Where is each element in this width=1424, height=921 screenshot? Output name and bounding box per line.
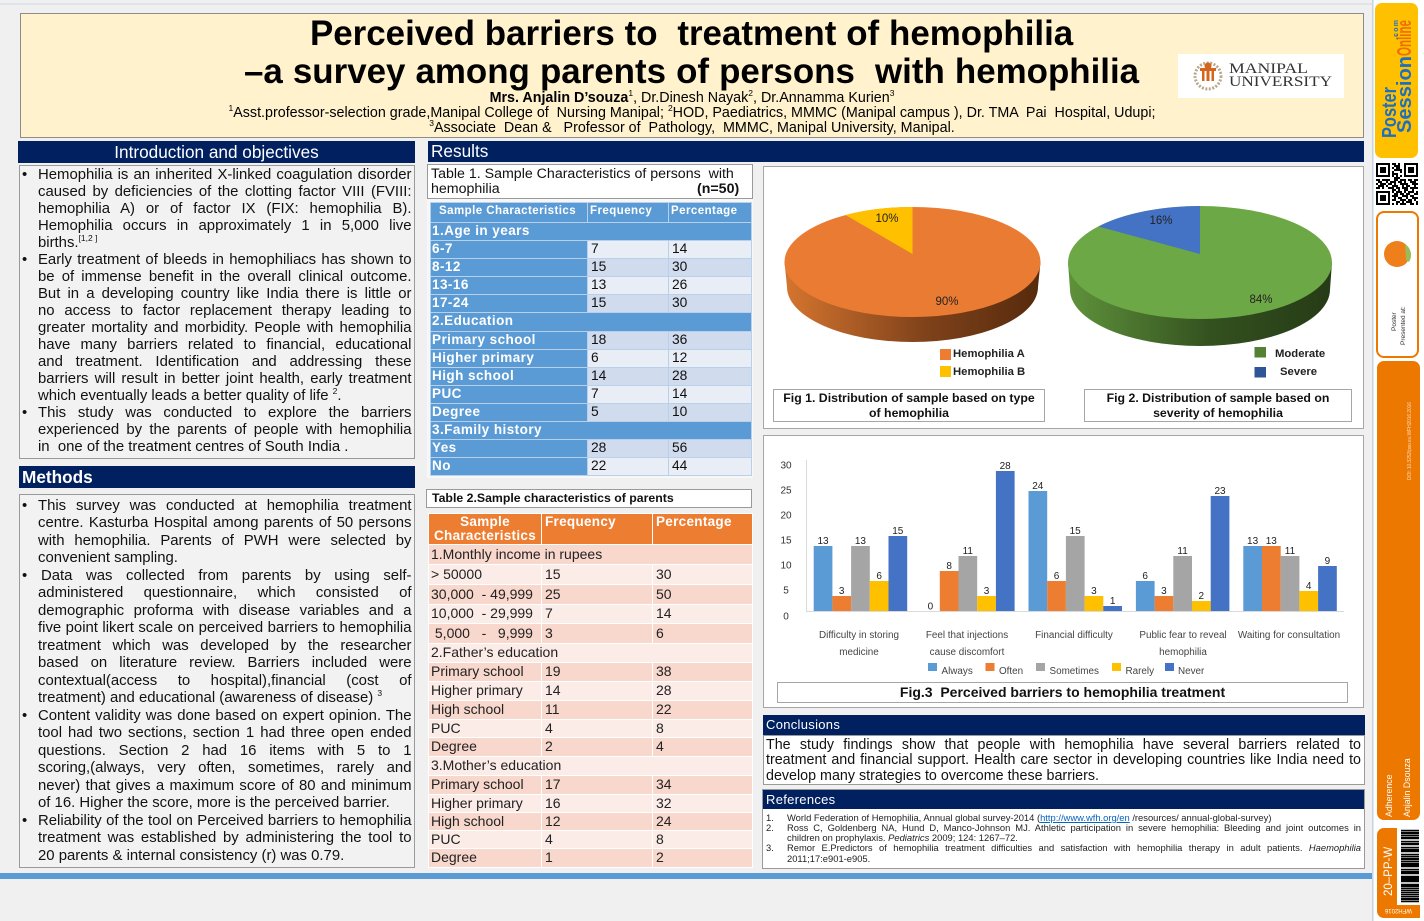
orange info strip: DOI: 10.3252/pso.eu.WFH2016.2016 [1407,402,1413,480]
panel: methods text: never) that gives a maximum score of 80 and minimum [38,778,412,794]
bars: often [832,546,1281,611]
orange info strip [1377,361,1420,820]
table 1: sample characteristics of persons: 12 [672,350,687,364]
panel: conclusions text: treatment and financial support. Health care sector in developing countries like India need to [766,752,1361,768]
pie chart: severity of hemophilia: 84% [1249,294,1273,306]
table 2: sample characteristics of parents: 22 [656,701,672,717]
table 1: sample characteristics of persons: 10 [672,404,687,418]
panel: references: Ross C, Goldenberg NA, Hund D, Manco-Johnson MJ. Athletic participation in severe hemophilia: Bleeding and joint outcomes in [787,822,1361,833]
logo wordmark: MANIPAL [1229,61,1308,77]
panel: pie charts [763,166,1364,429]
table 2: sample characteristics of parents: > 50000 [431,566,482,582]
table 2: sample characteristics of parents: 8 [656,720,664,736]
QR code [1376,164,1418,204]
table 1: sample characteristics of persons: 6 [591,350,599,364]
orange info strip: Adherence [1384,774,1394,817]
bar value labels: 24 [1032,481,1044,492]
panel: introduction text: Hemophilia occurs in approximately 1 in 5,000 live [38,218,412,234]
table 1: sample characteristics of persons: High school [432,368,514,382]
table 2: sample characteristics of parents: Primary school [431,776,524,792]
bars: never [888,471,1337,611]
table 2: sample characteristics of parents: 12 [545,812,561,828]
table 1: sample characteristics of persons: 14 [591,368,606,382]
table 1: sample characteristics of persons: 13-16 [432,276,469,292]
table 2: sample characteristics of parents: 1 [545,849,553,865]
sidebar logo: PosterSessionOnline [1375,3,1418,158]
panel: methods text: Reliability of the tool on Perceived barriers to hemophilia [38,812,412,828]
y axis labels: 30 [780,460,792,472]
table 1: sample characteristics of persons: 8-12 [432,258,461,274]
table 2: sample characteristics of parents: 4 [545,720,553,736]
orange info strip: Anjalin Dsouza [1402,758,1412,817]
table 2: sample characteristics of parents: 14 [656,605,672,621]
bars: rarely [870,581,1318,611]
legend: severity: Moderate [1275,348,1325,360]
table 2: sample characteristics of parents: 30,000 - 49,999 [431,586,533,602]
panel: references: 3. [766,842,774,853]
table 1: sample characteristics of persons: 30 [672,258,687,274]
table 2: sample characteristics of parents: Characteristics [434,528,536,543]
table 1: sample characteristics of persons: Percentage [671,204,738,216]
panel: methods text: contextual(access to hospital),financial (cost of [38,672,412,688]
panel: methods text: scoring,(always, very often, sometimes, rarely and [38,760,412,776]
table 2: sample characteristics of parents: 8 [656,830,664,846]
table 1: sample characteristics of persons: 2.Education [432,313,513,328]
table 2: sample characteristics of parents: 5,000 - 9,999 [435,624,533,640]
table 1: sample characteristics of persons: 30 [672,294,687,310]
y axis labels: 15 [780,536,792,546]
table 1: sample characteristics of persons: Sample Characteristics [439,204,576,216]
table 2: sample characteristics of parents: 14 [545,682,561,698]
table 2: sample characteristics of parents [428,513,753,868]
bottom band [0,873,1372,879]
poster code and barcode: WFH2016 [1384,907,1412,913]
panel: introduction text: caused by deficiencies of the clotting factor VIII (FVIII: [38,184,412,200]
heading: Introduction and objectives: Introduction and objectives [114,142,319,162]
heading: Results [428,141,1364,162]
table 2: sample characteristics of parents: 34 [656,776,672,792]
caption: figure 3: Fig.3 Perceived barriers to hemophilia treatment [900,684,1225,700]
heading: Methods [19,466,415,488]
table 1: sample characteristics of persons: PUC [432,386,462,400]
caption: figure 2: severity of hemophilia [1153,406,1283,420]
icon: crest [1195,62,1221,89]
category labels: Feel that injections [926,630,1008,641]
panel: introduction text: births.[1,2 ] [38,233,97,250]
panel: introduction text: greater mortality and morbidity. People with hemophilia [38,320,412,336]
caption: figure 3 [777,682,1348,703]
bar value labels: 11 [1177,546,1188,557]
caption: figure 2: Fig 2. Distribution of sample based on [1107,391,1329,405]
bar value labels: 6 [1142,571,1148,582]
panel: methods text [19,494,415,868]
panel: introduction text: • [22,252,27,268]
bar value labels: 13 [855,536,866,547]
table 1: sample characteristics of persons: 26 [672,276,687,292]
panel: methods text: • [22,812,27,828]
bar value labels: 6 [876,571,882,582]
table 2: sample characteristics of parents: 2 [545,738,553,754]
panel: references: Remor E.Predictors of hemophilia treatment difficulties and satisfaction with hemophilia therapy in adult patients. Haemophilia [787,842,1361,853]
table 2: sample characteristics of parents: Higher primary [431,682,523,698]
panel: methods text: 20 parents & internal consistency (r) was 0.79. [38,848,344,864]
bar chart legend: Often [999,666,1023,677]
heading: Results: Results [431,141,488,161]
table 2: sample characteristics of parents: 17 [545,776,561,792]
bar value labels: 3 [1091,586,1097,597]
table 1: sample characteristics of persons: 7 [591,240,599,256]
table 2: sample characteristics of parents: Degree [431,849,477,865]
pie chart: type of hemophilia [784,207,1040,342]
panel: methods text: administered questionnaire, which consisted of [38,585,412,601]
table 2: sample characteristics of parents: 24 [656,812,672,828]
table 2: sample characteristics of parents: 10,000 - 29,999 [431,605,533,621]
legend: hemophilia type: Hemophilia B [953,366,1025,378]
table 1: sample characteristics of persons: 7 [591,386,599,400]
poster code and barcode [1377,828,1420,918]
category labels: Difficulty in storing [819,630,899,641]
panel: bar chart of perceived barriers [763,435,1364,708]
category labels: hemophilia [1159,647,1207,658]
table 1: sample characteristics of persons: Degree [432,404,480,418]
heading: Introduction and objectives [18,141,415,163]
affiliation line 2: 3Associate Dean & Professor of Pathology, MMMC, Manipal University, Manipal. [429,118,955,136]
y axis labels: 10 [780,560,792,572]
table 1 caption: hemophilia [431,181,500,197]
table 2: sample characteristics of parents: Sample [460,514,510,529]
presented at box: Poster [1391,311,1398,331]
table 2: sample characteristics of parents: 3.Mother’s education [431,757,561,773]
panel: methods text: treatment was established by administering the tool to [38,830,412,846]
table 1: sample characteristics of persons: 14 [672,386,687,400]
panel: references: children on prophylaxis. Pediatrics 2009; 124: 1267–72. [787,832,1018,843]
logo: Manipal University [1178,54,1344,98]
panel: methods text: with hemophilia. Parents of PWH were selected by [38,532,412,548]
caption: figure 2 [1084,389,1352,422]
table 2 caption [426,489,752,508]
panel: introduction text: have many barriers related to financial, educational [38,336,412,352]
table 1: sample characteristics of persons: Frequency [590,204,652,216]
legend: hemophilia type [940,348,1025,378]
bar chart legend [928,663,1205,677]
bars: always [814,491,1262,611]
y axis labels: 5 [783,586,789,596]
title line 1: Perceived barriers to treatment of hemophilia [310,14,1073,53]
y axis labels: 20 [780,510,792,522]
table 1 caption: (n=50) [697,181,739,197]
table 1: sample characteristics of persons: 5 [591,404,599,418]
panel: methods text: treatment) and educational (awareness of disease) 3 [38,688,382,706]
panel: methods text: based on literature review. Barriers included were [38,655,412,671]
table 1: sample characteristics of persons [430,202,752,476]
table 2: sample characteristics of parents: Percentage [656,514,732,529]
caption: figure 1 [773,389,1045,422]
category labels [819,630,1340,658]
table 2 caption: Table 2.Sample characteristics of parents [432,491,674,505]
panel: introduction text: experienced by the parents of people with hemophilia [38,422,412,438]
table 1: sample characteristics of persons: 28 [672,368,687,382]
table 2: sample characteristics of parents: Frequency [545,514,616,529]
heading: Conclusions [763,715,1365,735]
pie chart: severity of hemophilia [1068,206,1332,346]
table 2: sample characteristics of parents: High school [431,701,504,717]
bar chart legend: Always [942,666,973,677]
panel: introduction text: Hemophilia is an inherited X-linked coagulation disorder [38,166,412,182]
bar value labels: 3 [839,586,845,597]
category labels: Public fear to reveal [1139,630,1227,641]
presented at box: Presented at: [1400,306,1407,345]
poster code and barcode: 20–PP-W [1383,847,1395,896]
panel: methods text: tool had two sections, section 1 had three open ended [38,725,412,741]
table 2: sample characteristics of parents: 50 [656,586,672,602]
bar value labels: 23 [1214,486,1226,497]
table 2: sample characteristics of parents: High school [431,812,504,828]
affiliation line 1: 1Asst.professor-selection grade,Manipal College of Nursing Manipal; 2HOD, Paediatrics, MMMC (Manipal campus ), Dr. TMA Pai Hospital, Udupi; [229,103,1155,121]
table 1: sample characteristics of persons: 3.Family history [432,422,542,436]
table 2: sample characteristics of parents: 16 [545,794,561,810]
panel: introduction text: But in a developing country like India there is little or [38,286,412,302]
table 1: sample characteristics of persons: No [432,458,451,472]
panel: references: 2011;17:e901-e905. [787,853,870,864]
panel: methods text: This survey was conducted at hemophilia treatment [38,498,412,514]
table 2: sample characteristics of parents: 3 [545,624,553,640]
bar value labels: 3 [984,586,990,597]
table 1: sample characteristics of persons: 14 [672,240,687,256]
bar value labels: 1 [1110,596,1116,607]
bar value labels: 2 [1199,591,1205,602]
panel: methods text: centre. Kasturba Hospital among parents of 50 persons [38,515,412,531]
bar value labels: 15 [892,526,904,537]
table 1: sample characteristics of persons: 36 [672,332,687,346]
top edge strip [0,3,1372,5]
table 1: sample characteristics of persons: 18 [591,332,606,346]
table 2: sample characteristics of parents: Primary school [431,663,524,679]
panel: conclusions text: develop many strategies to overcome these barriers. [766,768,1099,784]
panel: methods text: demographic proforma with disease variables and a [38,602,412,618]
pie chart: type of hemophilia: 90% [935,296,959,308]
table 1 caption [427,164,753,199]
table 1: sample characteristics of persons: Higher primary [432,350,534,364]
bar value labels: 6 [1054,571,1060,582]
bars: sometimes [851,536,1299,611]
panel: methods text: Content validity was done based on expert opinion. The [38,708,412,724]
bar value labels: 13 [817,536,829,547]
table 2: sample characteristics of parents: 30 [656,566,672,582]
bar value labels: 3 [1161,586,1167,597]
panel: methods text: • [22,568,27,584]
panel: references: 1. [766,812,774,823]
panel: introduction text: Early treatment of bleeds in hemophiliacs has shown to [38,252,412,268]
bar chart legend: Rarely [1126,666,1154,677]
sidebar [1372,0,1424,921]
heading: References: References [766,792,835,807]
bar value labels: 13 [1247,536,1259,547]
table 2: sample characteristics of parents: 38 [656,663,672,679]
table 1: sample characteristics of persons: 1.Age in years [432,222,530,238]
sidebar logo: PosterSessionOnline: Session [1394,56,1416,133]
authors: Mrs. Anjalin D’souza1, Dr.Dinesh Nayak2, Dr.Annamma Kurien3 [490,88,894,106]
bar value labels: 4 [1306,581,1312,592]
bar value labels: 15 [1070,526,1081,537]
panel: introduction text: be of immense benefit in the overall clinical outcome. [38,268,412,284]
panel: methods text: • [22,498,27,514]
table 1: sample characteristics of persons: Primary school [432,332,536,346]
legend: severity [1254,347,1325,378]
panel: references: 2. [766,822,774,833]
panel: introduction text: and treatment. Identification and addressing these [38,354,412,370]
table 2: sample characteristics of parents: 25 [545,586,561,602]
panel: methods text: convenient sampling. [38,550,178,566]
panel: conclusions text: The study findings show that people with hemophilia have several barriers related to [766,737,1361,753]
table 1: sample characteristics of persons: 22 [591,458,606,472]
table 2: sample characteristics of parents: 2 [656,849,664,865]
table 1: sample characteristics of persons: 15 [591,294,606,310]
caption: figure 1: Fig 1. Distribution of sample based on type [783,391,1035,405]
panel: conclusions text [763,735,1365,785]
panel: methods text: • [22,708,27,724]
table 2: sample characteristics of parents: 15 [545,566,561,582]
table 2: sample characteristics of parents: 7 [545,605,553,621]
table 1: sample characteristics of persons: 56 [672,440,687,454]
bar value labels: 13 [1266,536,1277,547]
panel: references [762,789,1365,869]
table 2: sample characteristics of parents: 11 [545,701,560,717]
heading: References [763,790,1364,809]
table 1 caption: Table 1. Sample Characteristics of persons with [431,166,734,182]
panel: introduction text: no access to factor replacement therapy leading to [38,302,412,318]
panel: introduction text: • [22,404,27,420]
sidebar logo: PosterSessionOnline: Poster [1379,87,1401,138]
bar value labels: 11 [963,546,973,557]
pie chart: type of hemophilia: 10% [875,213,899,225]
table 2: sample characteristics of parents: 19 [545,663,561,679]
panel: introduction text: • [22,166,27,182]
legend: hemophilia type: Hemophilia A [953,348,1025,360]
heading: Conclusions: Conclusions [766,717,840,732]
bar value labels: 28 [1000,461,1011,472]
panel: methods text: Data was collected from parents by using self- [41,568,412,584]
panel: introduction text: barriers will result in better joint health, early treatment [38,370,412,386]
bar chart legend: Never [1178,666,1205,677]
table 1: sample characteristics of persons: 6-7 [432,240,453,256]
bar chart legend: Sometimes [1050,666,1099,677]
panel: introduction text: hemophilia A) or of factor IX (FIX: hemophilia B). [38,200,412,216]
panel: introduction text: which eventually leads a better quality of life 2. [38,386,342,404]
table 2: sample characteristics of parents: 2.Father’s education [431,644,558,660]
table 2: sample characteristics of parents: 32 [656,794,672,810]
y axis labels: 0 [783,612,789,622]
category labels: cause discomfort [930,647,1005,658]
sidebar logo: PosterSessionOnline: .com [1393,20,1400,40]
bar value labels: 9 [1325,556,1331,567]
logo wordmark: UNIVERSITY [1229,74,1333,90]
panel: references: World Federation of Hemophilia, Annual global survey-2014 (http://www.wfh.org/en /resources/ annual-global-survey) [787,812,1271,823]
table 1: sample characteristics of persons: 13 [591,276,606,292]
table 1: sample characteristics of persons: 44 [672,458,687,472]
table 2: sample characteristics of parents: Higher primary [431,794,523,810]
table 1: sample characteristics of persons: 17-24 [432,294,469,310]
table 2: sample characteristics of parents: 6 [656,624,664,640]
table 1: sample characteristics of persons: 15 [591,258,606,274]
table 2: sample characteristics of parents: 1.Monthly income in rupees [431,546,602,562]
category labels: medicine [839,647,879,658]
bar value labels [817,461,1331,612]
bar value labels: 11 [1285,546,1296,557]
bar value labels: 8 [946,561,952,572]
table 1 backdrop [427,199,753,478]
logo wordmark [1229,61,1333,90]
panel: methods text: five point likert scale on perceived barriers to hemophilia [38,620,412,636]
presented at box [1377,212,1418,357]
bar value labels: 0 [928,602,934,612]
pie chart: severity of hemophilia: 16% [1149,215,1173,227]
title banner [20,13,1364,138]
table 2: sample characteristics of parents: 4 [656,738,664,754]
panel: introduction text: This study was conducted to explore the barriers [38,404,412,420]
y axis labels [780,460,792,622]
table 2: sample characteristics of parents: 4 [545,830,553,846]
panel: introduction text [19,165,415,459]
category labels: Waiting for consultation [1238,630,1340,641]
panel: methods text: treatment which was developed by the researcher [38,638,412,654]
title line 2: –a survey among parents of persons with hemophilia [244,52,1139,90]
table 2: sample characteristics of parents: 28 [656,682,672,698]
panel: methods text: questions. Section 2 had 16 items with 5 to 1 [38,742,412,758]
table 1: sample characteristics of persons: Yes [432,440,457,454]
y axis labels: 25 [780,486,792,496]
panel: introduction text: in one of the treatment centres of South India . [38,438,348,454]
table 2: sample characteristics of parents: PUC [431,720,461,736]
panel: methods text: of 16. Higher the score, more is the perceived barrier. [38,795,390,811]
table 1: sample characteristics of persons: 28 [591,440,606,454]
heading: Methods: Methods [22,467,93,487]
caption: figure 1: of hemophilia [869,406,949,420]
table 2: sample characteristics of parents: PUC [431,830,461,846]
category labels: Financial difficulty [1035,630,1113,641]
table 2: sample characteristics of parents: Degree [431,738,477,754]
legend: severity: Severe [1280,366,1317,378]
